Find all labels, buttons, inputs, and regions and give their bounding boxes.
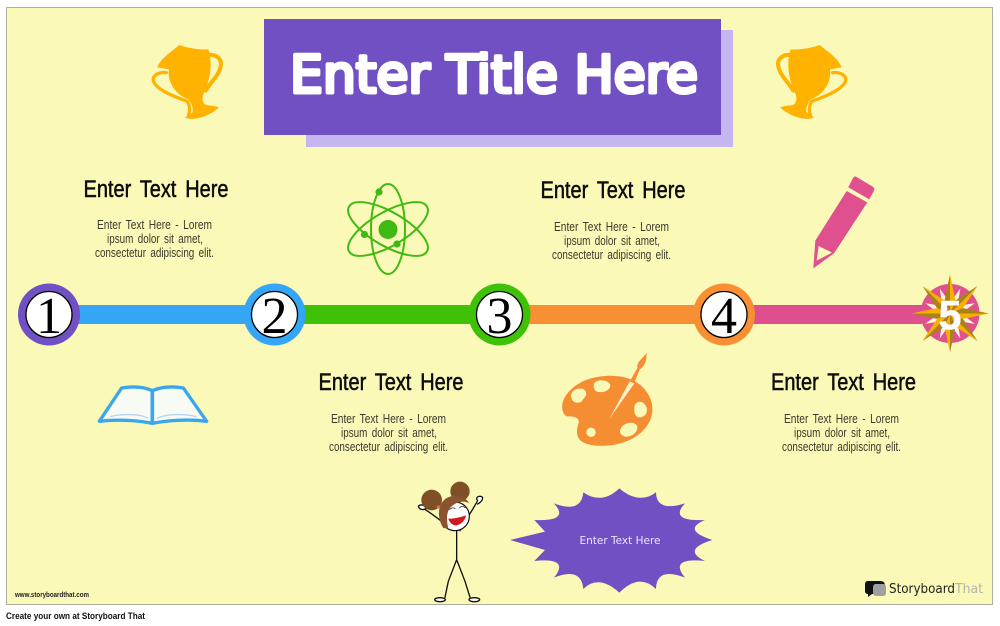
marker 2: 2	[262, 288, 288, 345]
text block 1: Enter Text Here	[84, 176, 228, 203]
marker 4: 4	[711, 288, 737, 345]
marker 4	[693, 284, 755, 346]
marker 5: compass star	[911, 274, 989, 352]
Storyboard That logo: That	[954, 581, 983, 597]
text block 3: Enter Text Here - Lorem	[554, 220, 669, 234]
text block 3	[540, 177, 686, 262]
text block 4: ipsum dolor sit amet,	[794, 426, 890, 440]
marker 3: 3	[486, 288, 512, 345]
text block 4	[771, 369, 916, 454]
title banner	[264, 19, 733, 147]
footer credit: Create your own at Storyboard That	[6, 611, 146, 622]
text block 1: ipsum dolor sit amet,	[107, 232, 203, 246]
text block 1: Enter Text Here - Lorem	[97, 218, 212, 232]
text block 1	[84, 176, 228, 260]
icon: paint palette	[562, 353, 652, 446]
segment: pink	[752, 305, 922, 324]
character: stick figure girl	[418, 482, 483, 602]
segment: green	[303, 305, 473, 324]
text block 3: ipsum dolor sit amet,	[564, 234, 660, 248]
callout burst: Enter Text Here	[580, 535, 660, 547]
icon: right trophy	[778, 45, 846, 119]
website label: www.storyboardthat.com	[14, 592, 89, 599]
text block 3: consectetur adipiscing elit.	[552, 248, 671, 262]
icon: pencil	[813, 177, 874, 268]
marker 1	[18, 284, 80, 346]
icon: open book	[99, 387, 207, 424]
text block 1: consectetur adipiscing elit.	[95, 246, 214, 260]
marker 3	[468, 284, 530, 346]
text block 4: Enter Text Here - Lorem	[784, 412, 899, 426]
segment: blue	[78, 305, 248, 324]
text block 4: consectetur adipiscing elit.	[782, 440, 901, 454]
segment: orange	[528, 305, 698, 324]
marker 5: compass star: 5	[939, 292, 961, 338]
text block 2	[318, 369, 464, 454]
icon: atom	[341, 184, 435, 274]
icon: left trophy	[153, 45, 221, 119]
marker 2	[244, 284, 306, 346]
marker 1: 1	[36, 288, 62, 345]
callout burst	[510, 488, 712, 593]
timeline	[18, 274, 989, 352]
text block 2: Enter Text Here	[318, 369, 464, 396]
Storyboard That logo	[865, 581, 983, 597]
text block 2: consectetur adipiscing elit.	[329, 440, 448, 454]
title banner: Enter Title Here	[290, 46, 698, 106]
text block 2: Enter Text Here - Lorem	[331, 412, 446, 426]
text block 4: Enter Text Here	[771, 369, 916, 396]
text block 3: Enter Text Here	[540, 177, 686, 204]
text block 2: ipsum dolor sit amet,	[341, 426, 437, 440]
Storyboard That logo: Storyboard	[889, 581, 955, 597]
